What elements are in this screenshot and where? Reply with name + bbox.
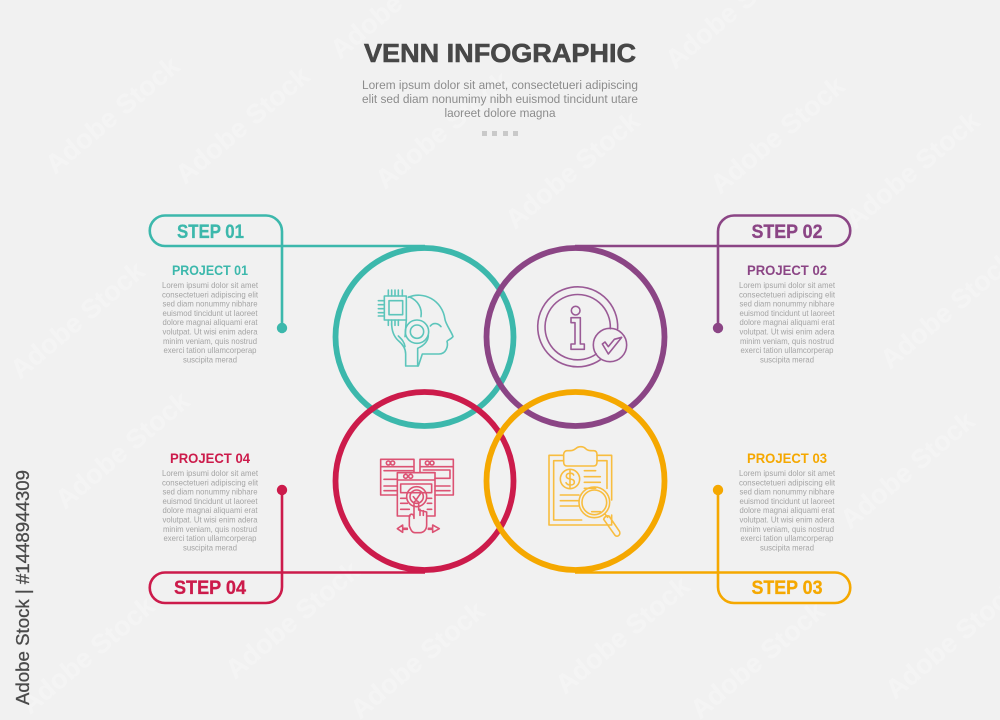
step 03 label: STEP 03 [752,578,822,599]
project 03 text block: PROJECT 03 [747,450,827,466]
project 01 text block: sed diam nonummy nibhare [162,299,258,309]
project 01 text block: Lorem ipsumi dolor sit amet [162,280,259,290]
step 04 label: STEP 04 [174,578,246,599]
watermark pattern: Adobe Stock [5,255,151,385]
project 03 text block: Lorem ipsumi dolor sit amet [739,468,836,478]
project 04 text block: Lorem ipsumi dolor sit amet [162,468,259,478]
project 04 text block: sed diam nonummy nibhare [162,487,258,497]
project 02 text block: consectetueri adipiscing elit [739,289,836,299]
project 02 text block: dolore magnai aliquami erat [740,317,835,327]
venn circle: crimson [336,392,514,570]
project 03 text block: minim veniam, quis nostrud [740,524,834,534]
watermark pattern: Adobe Stock [170,60,316,190]
project 04 text block: consectetueri adipiscing elit [162,477,259,487]
icon: web pages with hand [381,459,453,533]
project 01 text block: euismod tincidunt ut laoreet [162,308,258,318]
subtitle: Lorem ipsum dolor sit amet, consectetueri adipiscing [362,78,638,92]
watermark pattern: Adobe Stock [40,50,186,180]
project 02 text block [739,262,836,364]
project 01 text block: suscipita merad [183,354,237,364]
project 02 text block: suscipita merad [760,354,814,364]
project 02 text block: Lorem ipsumi dolor sit amet [739,280,836,290]
watermark pattern: Adobe Stock [705,70,851,200]
icon: AI head with chip [378,290,453,366]
icon: clipboard with magnifier [549,447,620,536]
project 04 text block: minim veniam, quis nostrud [163,524,257,534]
project 01 text block: minim veniam, quis nostrud [163,336,257,346]
project 03 text block: volutpat. Ut wisi enim adera [740,514,835,524]
subtitle [362,78,638,120]
project 02 text block: PROJECT 02 [747,262,827,278]
project 02 text block: exerci tation ullamcorperap [740,345,834,355]
project 03 text block: exerci tation ullamcorperap [740,533,834,543]
project 03 text block: euismod tincidunt ut laoreet [740,496,835,506]
project 03 text block: suscipita merad [760,542,814,552]
project 01 text block: dolore magnai aliquami erat [162,317,258,327]
project 01 text block: exerci tation ullamcorperap [164,345,257,355]
project 01 text block: volutpat. Ut wisi enim adera [162,326,258,336]
step 02 connector [575,216,850,333]
project 04 text block: volutpat. Ut wisi enim adera [162,514,258,524]
watermark pattern: Adobe Stock [840,105,986,235]
project 04 text block: euismod tincidunt ut laoreet [162,496,258,506]
project 02 text block: minim veniam, quis nostrud [740,336,834,346]
project 02 text block: euismod tincidunt ut laoreet [740,308,835,318]
watermark pattern: Adobe Stock [370,65,516,195]
step 03 connector [575,485,850,603]
project 04 text block [162,450,259,552]
watermark pattern: Adobe Stock [500,105,646,235]
project 03 text block: sed diam nonummy nibhare [740,487,835,497]
venn circle: amber [486,392,664,570]
venn circle: teal [336,248,514,426]
project 04 text block: dolore magnai aliquami erat [162,505,258,515]
watermark pattern: Adobe Stock [220,555,366,685]
step 04 connector [150,485,425,603]
project 01 text block: consectetueri adipiscing elit [162,289,259,299]
title: VENN INFOGRAPHIC [364,38,636,68]
watermark pattern: Adobe Stock [50,385,196,515]
subtitle: laoreet dolore magna [444,106,556,120]
venn circle: purple [486,248,664,426]
watermark pattern: Adobe Stock [550,570,696,700]
divider dots [482,131,518,136]
project 02 text block: sed diam nonummy nibhare [740,299,835,309]
project 01 text block: PROJECT 01 [172,262,248,278]
subtitle: elit sed diam nonumimy nibh euismod tincidunt utare [362,92,638,106]
icon: info with checkmark [538,287,627,367]
project 04 text block: suscipita merad [183,542,237,552]
watermark pattern: Adobe Stock [835,405,981,535]
step 01 connector [150,216,425,333]
project 02 text block: volutpat. Ut wisi enim adera [740,326,835,336]
watermark pattern: Adobe Stock [15,590,161,720]
project 04 text block: PROJECT 04 [170,450,250,466]
stock id sidebar: Adobe Stock | #1448944309 [13,470,33,705]
project 03 text block: consectetueri adipiscing elit [739,477,836,487]
step 01 label: STEP 01 [177,222,244,243]
project 04 text block: exerci tation ullamcorperap [164,533,257,543]
project 03 text block: dolore magnai aliquami erat [740,505,835,515]
project 01 text block [162,262,259,364]
step 02 label: STEP 02 [752,222,822,243]
project 03 text block [739,450,836,552]
